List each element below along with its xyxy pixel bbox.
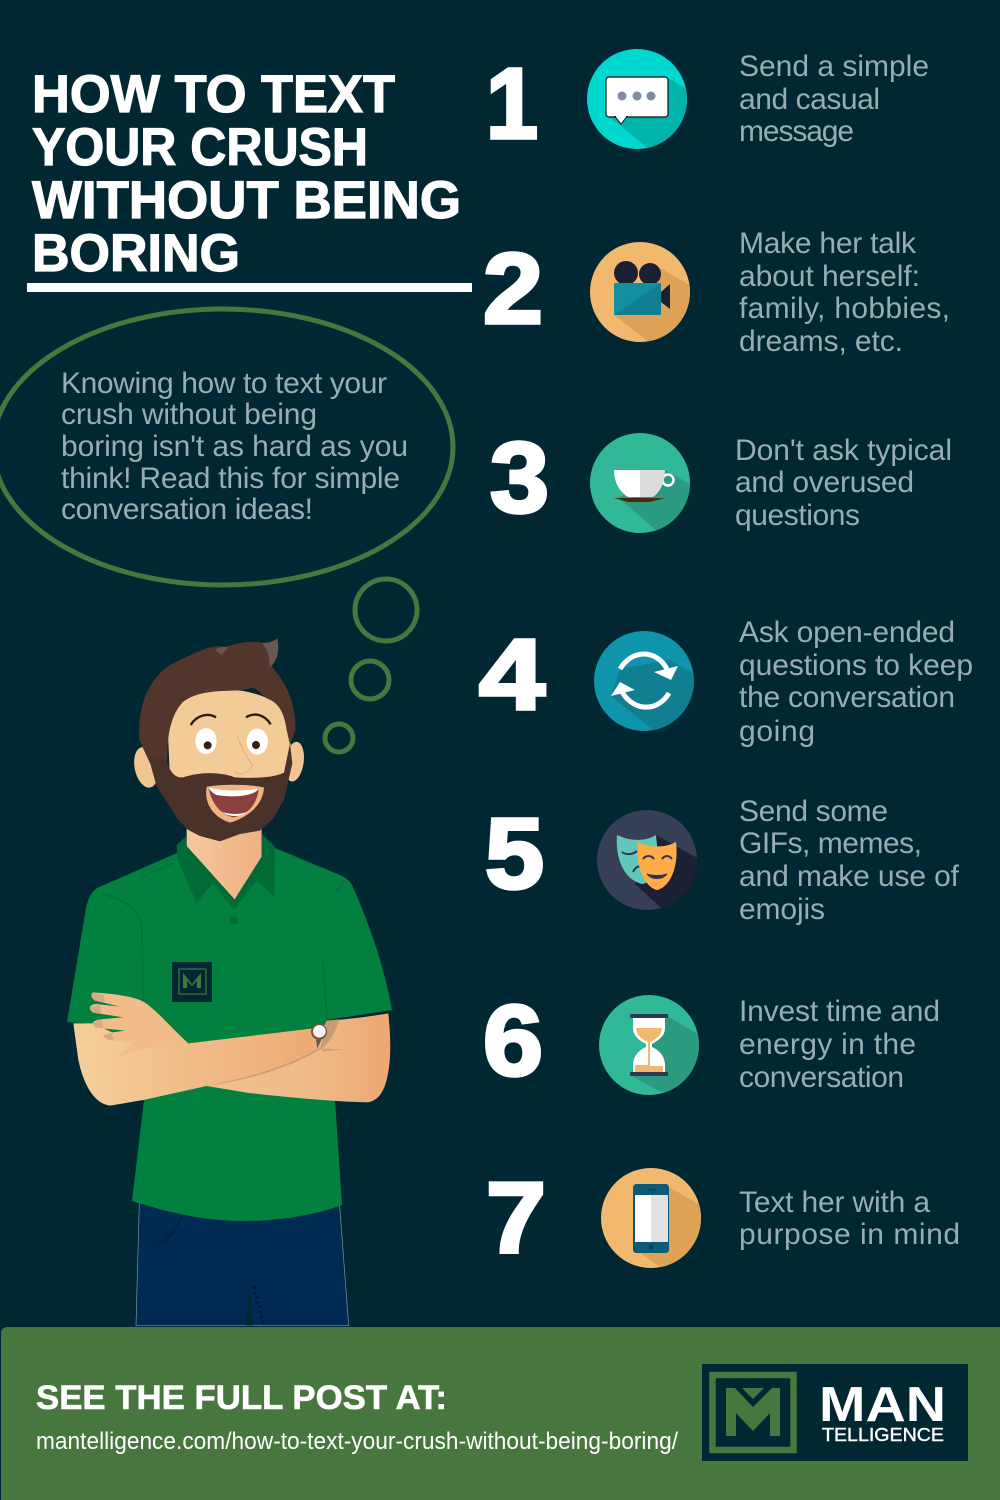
step 5	[486, 800, 959, 925]
logo	[702, 1364, 968, 1461]
text 4: Ask open-ended	[739, 616, 955, 649]
text 4: questions to keep	[739, 649, 973, 682]
wristwatch	[316, 1039, 322, 1049]
text 1	[739, 50, 929, 148]
text 3: and overused	[735, 466, 914, 499]
logo: TELLIGENCE	[822, 1425, 944, 1445]
step 6	[485, 995, 938, 1095]
text 6: conversation	[739, 1061, 904, 1094]
intro text: Knowing how to text your	[61, 367, 387, 400]
neck	[177, 825, 275, 924]
text 6	[739, 995, 940, 1094]
text 6: energy in the	[739, 1028, 916, 1061]
text 7	[739, 1186, 960, 1251]
title: BORING	[32, 224, 240, 283]
text 1: Send a simple	[739, 50, 929, 83]
shirt	[67, 848, 392, 1221]
medium bubble	[351, 661, 389, 699]
intro text: crush without being	[61, 398, 317, 431]
head	[131, 638, 306, 841]
step 4	[478, 620, 972, 747]
icon: speech bubble	[587, 49, 687, 149]
footer banner	[1, 1327, 1000, 1500]
text 7: purpose in mind	[739, 1218, 960, 1251]
number 5: 5	[485, 798, 544, 910]
number 1: 1	[486, 48, 538, 160]
nose	[235, 736, 253, 774]
footer url: mantelligence.com/how-to-text-your-crush-without-being-boring/	[36, 1428, 678, 1455]
step 3	[490, 433, 950, 533]
footer heading: SEE THE FULL POST AT:	[36, 1379, 447, 1417]
collar	[177, 834, 275, 910]
eyebrows	[191, 715, 216, 725]
text 5	[739, 795, 960, 926]
hair	[139, 638, 295, 763]
text 2: family, hobbies,	[739, 292, 950, 325]
text 1: and casual	[739, 83, 880, 116]
small bubble	[325, 724, 353, 752]
chin skin	[206, 785, 264, 823]
text 3: Don't ask typical	[735, 434, 952, 467]
title: WITHOUT BEING	[32, 171, 461, 230]
text 1: message	[739, 115, 854, 148]
intro text: conversation ideas!	[61, 493, 313, 526]
shirt seams	[103, 855, 345, 1100]
text 4	[739, 616, 973, 748]
text 2: Make her talk	[739, 227, 917, 260]
text 5: and make use of	[739, 860, 960, 893]
icon: coffee cup	[590, 433, 690, 533]
text 3	[735, 434, 952, 532]
mouth	[208, 787, 259, 817]
step 7	[488, 1168, 958, 1268]
text 2	[739, 227, 950, 358]
step 2	[484, 232, 948, 355]
text 6: Invest time and	[739, 995, 940, 1028]
speech ellipse	[0, 309, 453, 585]
number 7: 7	[486, 1162, 546, 1274]
trousers	[136, 1202, 349, 1326]
man illustration	[67, 638, 392, 1326]
badge	[172, 962, 212, 1002]
icon: smartphone	[601, 1168, 701, 1268]
intro text	[61, 367, 408, 526]
thought bubble	[0, 309, 453, 752]
text 2: about herself:	[739, 260, 920, 293]
text 5: Send some	[739, 795, 888, 828]
icon: refresh arrows	[594, 631, 694, 731]
face	[167, 689, 292, 803]
icon: video camera	[590, 242, 690, 342]
icon: hourglass	[599, 995, 699, 1095]
text 5: GIFs, memes,	[739, 827, 922, 860]
beard	[148, 743, 292, 841]
ears	[131, 745, 161, 790]
number 6: 6	[483, 985, 543, 1097]
text 2: dreams, etc.	[739, 325, 903, 358]
eyes	[195, 728, 217, 754]
number 4: 4	[479, 619, 545, 731]
title underline	[27, 283, 472, 292]
number 3: 3	[490, 422, 549, 534]
text 4: going	[739, 715, 815, 748]
number 2: 2	[483, 233, 543, 345]
step 1	[490, 49, 928, 149]
title	[32, 65, 461, 283]
intro text: boring isn't as hard as you	[61, 430, 408, 463]
text 3: questions	[735, 499, 860, 532]
icon: theatre masks	[597, 810, 697, 910]
logo: MAN	[819, 1378, 946, 1432]
title: YOUR CRUSH	[32, 118, 368, 177]
large bubble	[355, 579, 417, 641]
text 5: emojis	[739, 893, 825, 926]
crossed arms	[73, 992, 390, 1106]
text 7: Text her with a	[739, 1186, 930, 1219]
intro text: think! Read this for simple	[61, 462, 400, 495]
text 4: the conversation	[739, 681, 955, 714]
title: HOW TO TEXT	[32, 65, 395, 124]
